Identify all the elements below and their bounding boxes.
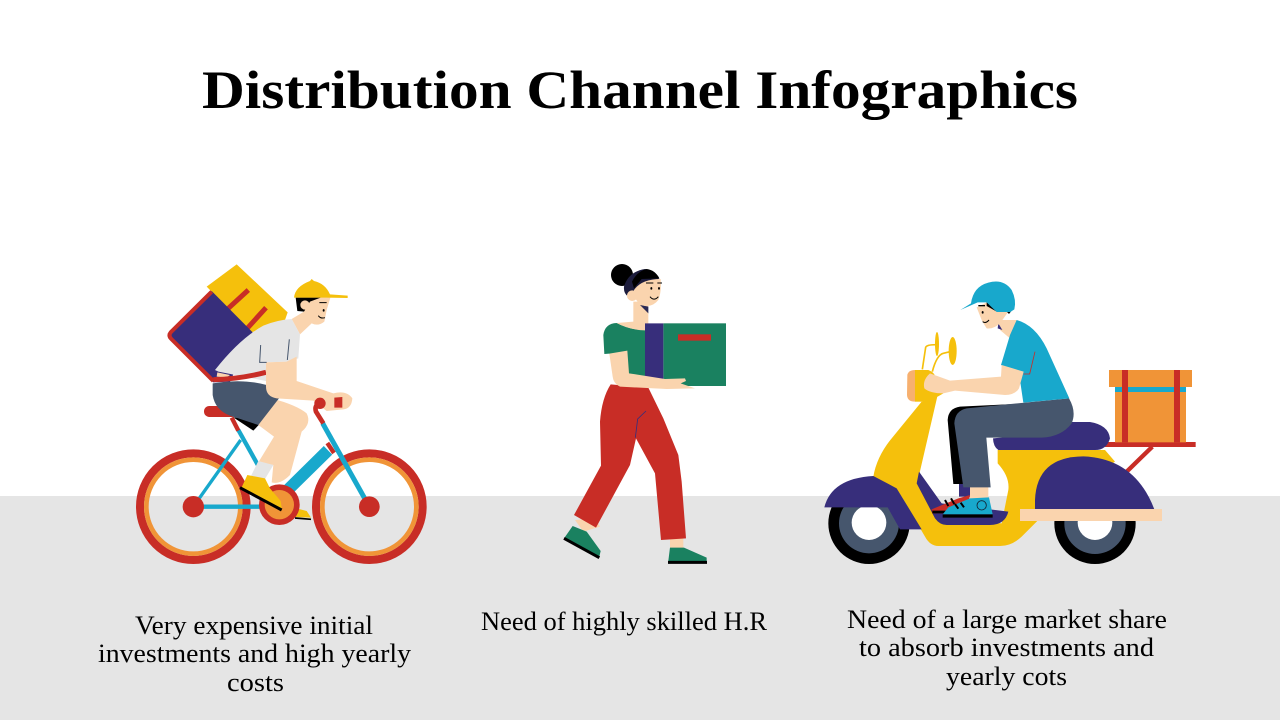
rider legs and shoes — [932, 398, 1074, 516]
rider head and cap — [294, 279, 348, 325]
illustration: cyclist courier — [140, 264, 423, 560]
illustration: scooter courier — [824, 281, 1196, 564]
caption: right: Need of a large market share — [847, 605, 1167, 634]
caption: right: yearly cots — [946, 662, 1067, 691]
rear box rack — [1105, 370, 1196, 472]
ground band — [0, 496, 1280, 720]
caption: left: investments and high yearly — [98, 639, 411, 668]
backpack — [168, 264, 288, 382]
rider legs and shorts — [213, 381, 308, 525]
caption: right: to absorb investments and — [859, 633, 1154, 662]
rider torso, arm and head — [924, 281, 1069, 403]
caption: middle: Need of highly skilled H.R — [481, 607, 768, 636]
bicycle — [140, 403, 423, 560]
wheels — [828, 483, 1136, 564]
caption: left: costs — [227, 668, 284, 697]
caption: right — [847, 605, 1167, 691]
rider torso and arm — [213, 310, 352, 411]
pants and shoes — [564, 384, 707, 562]
scooter body — [824, 332, 1162, 546]
title: Distribution Channel Infographics — [202, 60, 1078, 120]
head with hair bun — [611, 264, 662, 325]
illustration: woman carrying box — [564, 264, 726, 562]
caption: left — [98, 611, 411, 697]
caption: left: Very expensive initial — [135, 611, 373, 640]
torso and box — [603, 322, 726, 389]
